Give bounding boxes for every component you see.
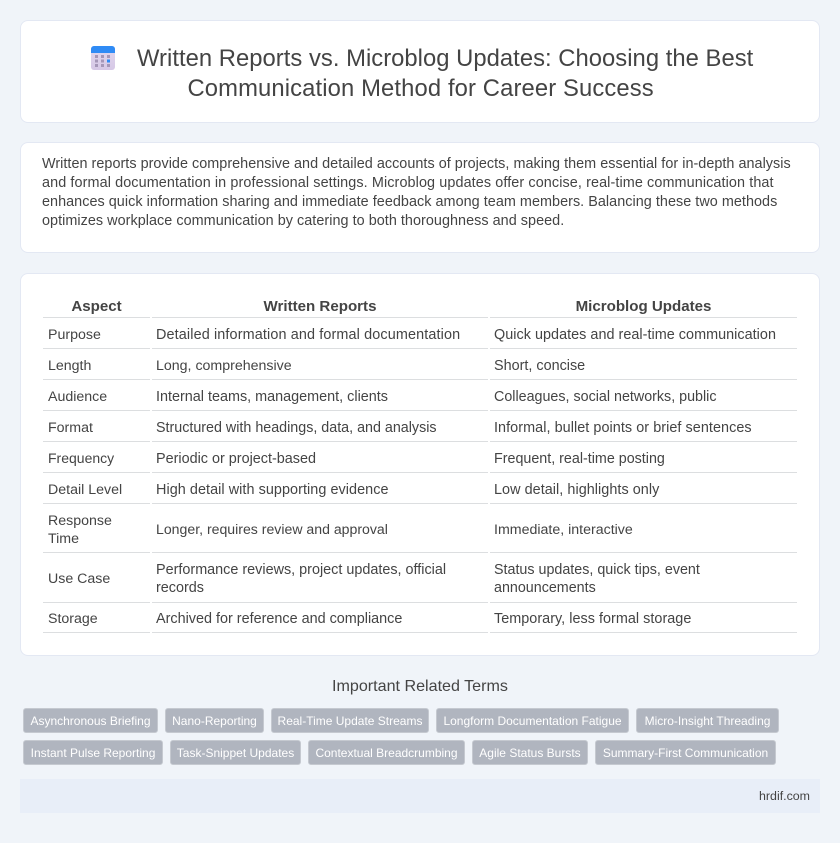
- title: Communication Method for Career Success: [188, 75, 654, 102]
- tag list: related terms: [23, 708, 779, 765]
- tag: [308, 740, 465, 765]
- cell: announcements: [494, 580, 596, 596]
- icon: calendar: [91, 46, 115, 70]
- text block: introduction: and formal documentation in professional settings. Microblog updates offer concise, real-time communication that: [42, 175, 774, 191]
- cell: records: [156, 580, 204, 596]
- text block: introduction: enhances quick information sharing and immediate feedback among team members. Balancing these two methods: [42, 194, 777, 210]
- heading: related terms: Important Related Terms: [332, 677, 508, 695]
- tag: [436, 708, 629, 733]
- row: Purpose: Purpose: [48, 327, 101, 343]
- tag: Longform Documentation Fatigue: [443, 714, 622, 728]
- panel: title card: [20, 20, 820, 123]
- tag: Nano-Reporting: [172, 714, 257, 728]
- tag: [636, 708, 779, 733]
- cell: Low detail, highlights only: [494, 482, 659, 498]
- cell: Short, concise: [494, 358, 585, 374]
- cell: Colleagues, social networks, public: [494, 389, 717, 405]
- cell: Archived for reference and compliance: [156, 611, 402, 627]
- row: Storage: Storage: [48, 611, 98, 627]
- cell: Performance reviews, project updates, official: [156, 562, 446, 578]
- row: Audience: Audience: [48, 389, 107, 405]
- tag: [23, 708, 158, 733]
- cell: Structured with headings, data, and analysis: [156, 420, 437, 436]
- row: Frequency: Frequency: [48, 450, 114, 466]
- row: Response Time: Time: [48, 531, 79, 547]
- tag: [23, 740, 163, 765]
- tag: [595, 740, 776, 765]
- cell: Periodic or project-based: [156, 451, 316, 467]
- row: Detail Level: Detail Level: [48, 482, 122, 498]
- cell: Immediate, interactive: [494, 522, 633, 538]
- cell: Detailed information and formal documentation: [156, 327, 460, 343]
- tag: Asynchronous Briefing: [30, 714, 151, 728]
- cell: Internal teams, management, clients: [156, 389, 388, 405]
- cell: Quick updates and real-time communication: [494, 327, 776, 343]
- header: Microblog Updates: Microblog Updates: [576, 298, 711, 315]
- comparison table: [43, 298, 797, 633]
- row: Response Time: Response: [48, 513, 112, 529]
- tag: Contextual Breadcrumbing: [315, 746, 458, 760]
- tag: [472, 740, 588, 765]
- tag: Instant Pulse Reporting: [31, 746, 155, 760]
- tag: Agile Status Bursts: [479, 746, 581, 760]
- cell: Temporary, less formal storage: [494, 611, 691, 627]
- header: Written Reports: Written Reports: [264, 298, 376, 315]
- cell: [156, 562, 446, 596]
- tag: Real-Time Update Streams: [278, 714, 422, 728]
- header: Aspect: Aspect: [71, 298, 122, 315]
- title: Written Reports vs. Microblog Updates: Choosing the Best: [137, 45, 753, 72]
- row: Use Case: Use Case: [48, 571, 110, 587]
- cell: [494, 562, 700, 596]
- row: Length: Length: [48, 358, 91, 374]
- cell: Informal, bullet points or brief sentences: [494, 420, 752, 436]
- cell: High detail with supporting evidence: [156, 482, 389, 498]
- cell: Frequent, real-time posting: [494, 451, 665, 467]
- panel: introduction: [20, 142, 820, 253]
- text block: introduction: [42, 156, 791, 229]
- tag: [165, 708, 264, 733]
- footer source: hrdif.com: [759, 789, 810, 803]
- text block: introduction: Written reports provide comprehensive and detailed accounts of projects, making them essential for in-depth analysis: [42, 156, 791, 172]
- tag: Task-Snippet Updates: [177, 746, 294, 760]
- cell: Longer, requires review and approval: [156, 521, 388, 537]
- panel: comparison table: [20, 273, 820, 656]
- tag: Micro-Insight Threading: [645, 714, 770, 728]
- tag: [170, 740, 301, 765]
- row: Format: Format: [48, 420, 93, 436]
- title: [137, 45, 754, 102]
- footer bar: [20, 779, 820, 813]
- cell: Long, comprehensive: [156, 358, 292, 374]
- cell: Status updates, quick tips, event: [494, 562, 700, 578]
- tag: [271, 708, 429, 733]
- row: Response Time: [48, 513, 112, 547]
- tag: Summary-First Communication: [603, 746, 768, 760]
- text block: introduction: optimizes workplace communication by catering to both thoroughness and speed.: [42, 213, 564, 229]
